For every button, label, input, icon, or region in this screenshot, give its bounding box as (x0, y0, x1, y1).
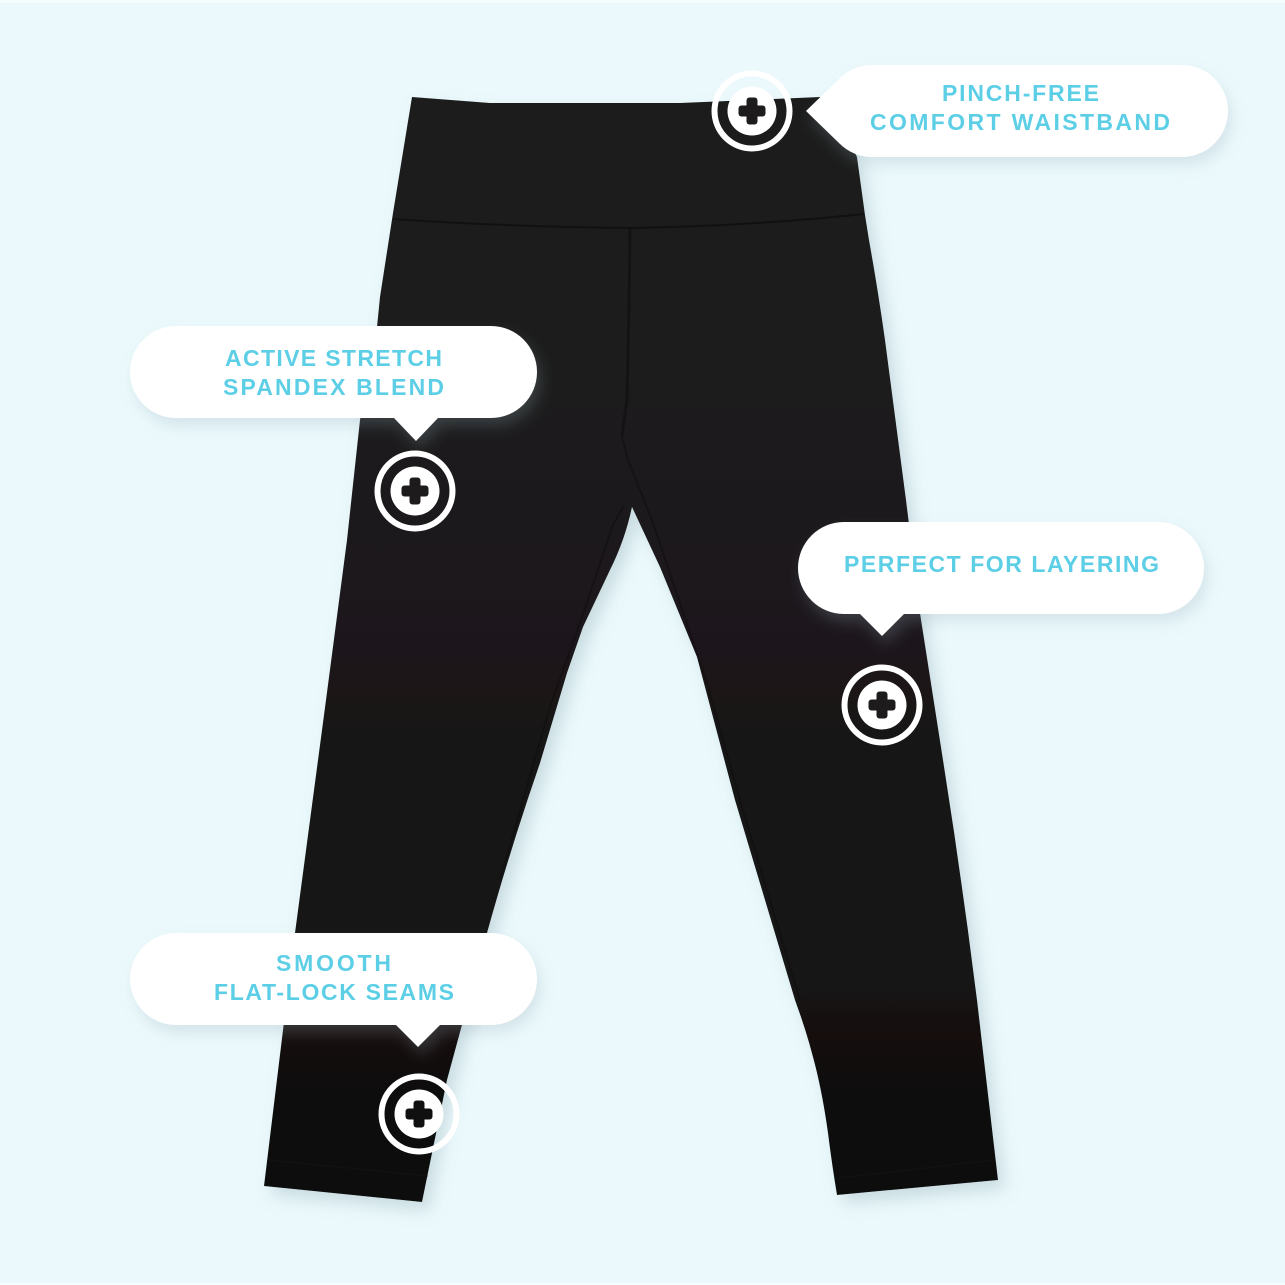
callout: perfect for layering: PERFECT FOR LAYERING (844, 551, 1159, 577)
icon: plus marker on lower leg (382, 1076, 456, 1152)
top edge strip (0, 0, 1285, 3)
left hem stitch (268, 1160, 428, 1176)
callout: perfect for layering (798, 522, 1204, 636)
left inseam stitch (500, 505, 624, 880)
callout: active stretch spandex blend: SPANDEX BLEND (223, 374, 444, 400)
icon: plus marker on waistband (714, 74, 790, 148)
callout: smooth flat-lock seams: SMOOTH (276, 950, 391, 976)
centre seam (622, 228, 630, 436)
callout: pinch-free comfort waistband (806, 65, 1228, 157)
leggings (264, 97, 998, 1202)
icon: plus marker on upper leg (378, 454, 452, 528)
bottom edge strip (0, 1283, 1285, 1285)
right inseam stitch (622, 436, 800, 1000)
waistband seam (393, 214, 864, 228)
callout: active stretch spandex blend (130, 326, 537, 441)
callout: smooth flat-lock seams (130, 933, 537, 1047)
icon: plus marker on right leg (844, 668, 920, 742)
callout: smooth flat-lock seams: FLAT-LOCK SEAMS (214, 979, 454, 1005)
callout: pinch-free comfort waistband: PINCH-FREE (942, 80, 1099, 106)
right hem stitch (838, 1160, 994, 1178)
callout: active stretch spandex blend: ACTIVE STRETCH (225, 345, 442, 371)
callout: pinch-free comfort waistband: COMFORT WAISTBAND (870, 109, 1170, 135)
